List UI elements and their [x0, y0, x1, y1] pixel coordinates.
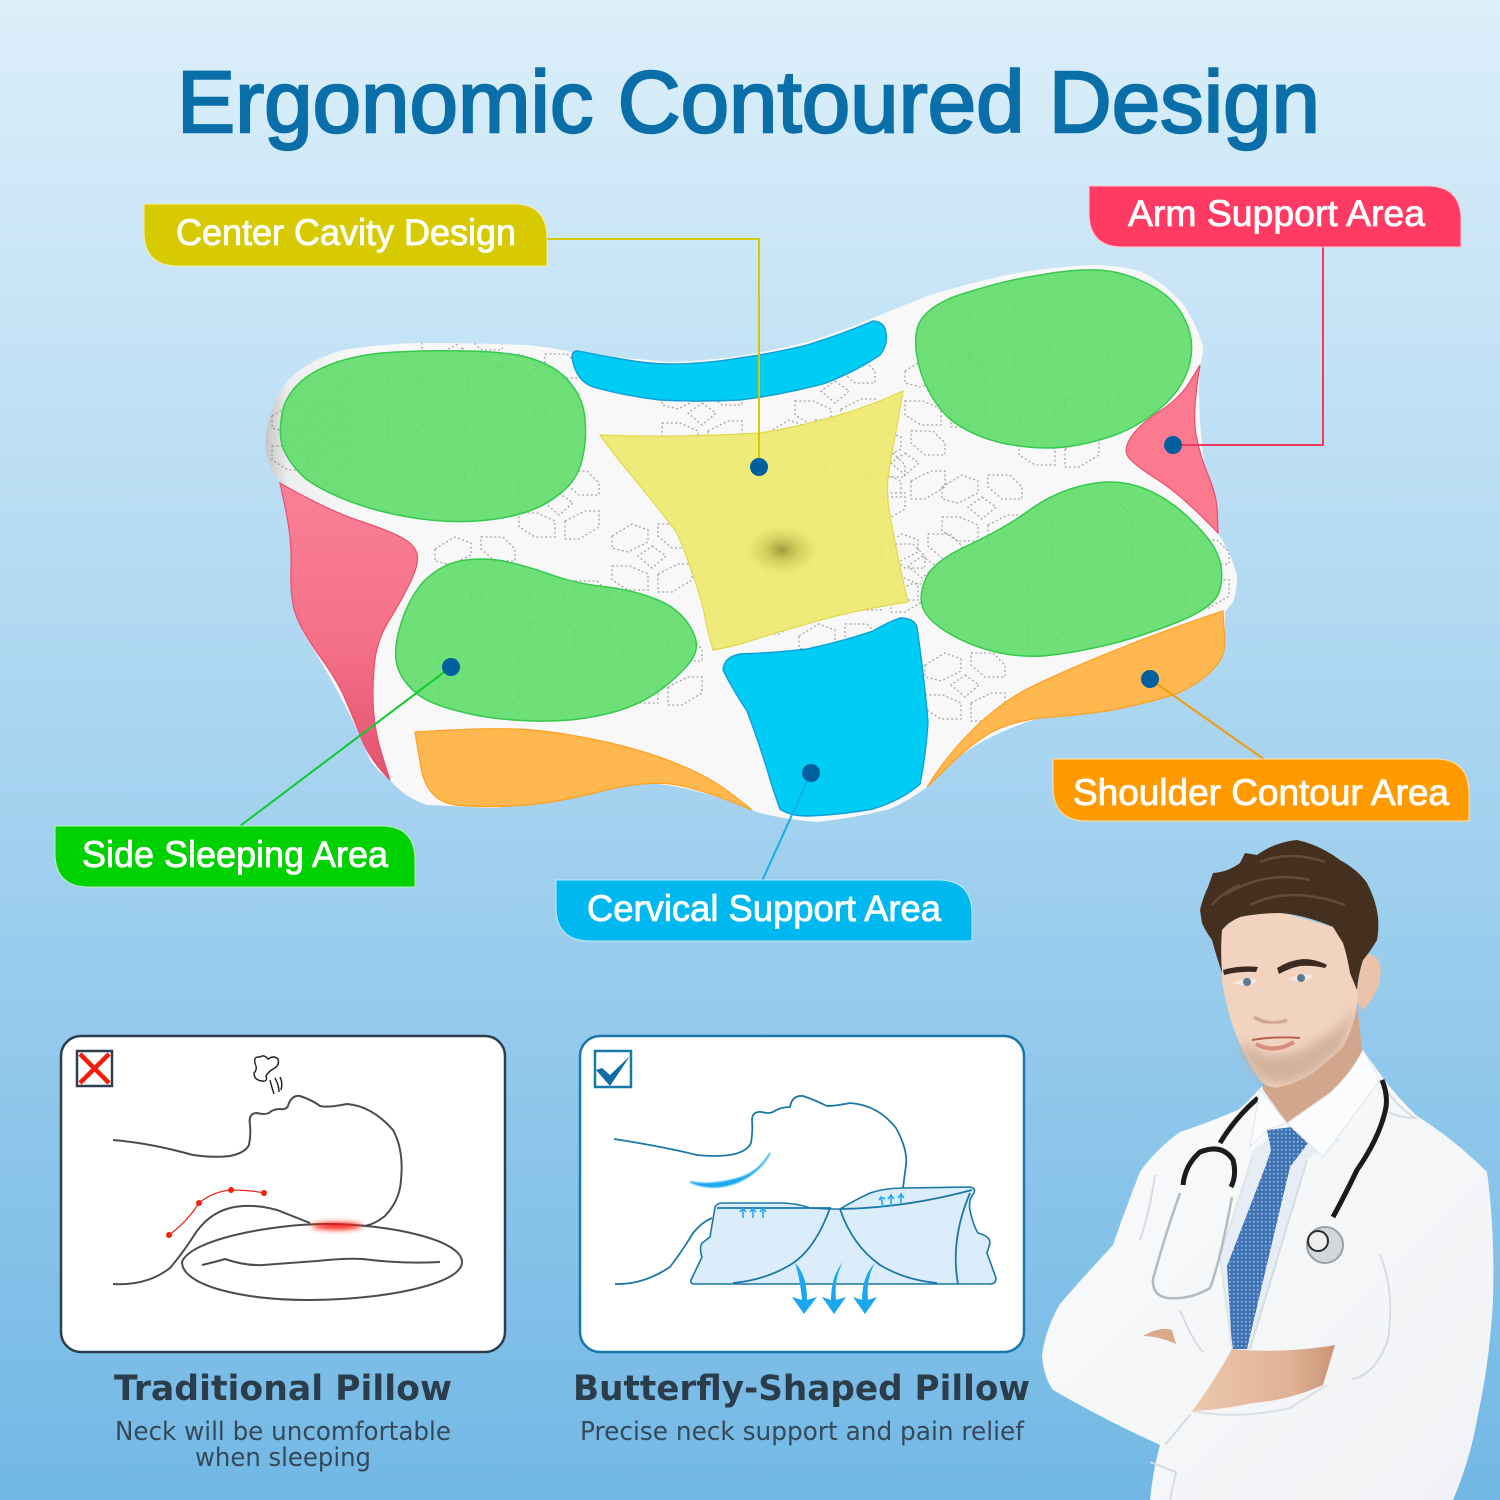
zone: yellow center cavity — [600, 391, 908, 650]
zone: green upper right — [916, 270, 1192, 448]
doctor figure — [1042, 840, 1493, 1500]
eyes — [1233, 974, 1314, 986]
necktie — [1227, 1127, 1308, 1349]
label: cervical support area: Cervical Support Area — [587, 888, 941, 929]
caption: traditional pillow — [114, 1369, 452, 1473]
icon: red cross — [77, 1051, 112, 1086]
illustration: head and neck outline — [113, 1096, 462, 1300]
ear — [1355, 954, 1381, 1010]
nose and mouth — [1252, 1017, 1300, 1049]
icon: check mark — [595, 1051, 631, 1087]
zone: green upper left — [280, 351, 586, 522]
pillow diagram — [265, 265, 1237, 822]
zone: blue top neck area — [572, 321, 886, 401]
stubble shading — [1238, 1003, 1357, 1084]
caption: butterfly-shaped pillow: Butterfly-Shaped Pillow — [573, 1369, 1030, 1409]
icon: neck support swoosh — [690, 1153, 770, 1187]
caption: butterfly-shaped pillow — [573, 1369, 1030, 1447]
zone: blue cervical support — [723, 618, 928, 816]
hand under arm — [1143, 1329, 1176, 1344]
label: shoulder contour area — [1053, 759, 1469, 821]
marker dots — [442, 436, 1182, 782]
pillow body — [265, 265, 1237, 822]
label: center cavity design — [144, 204, 547, 266]
red spine curve — [166, 1187, 267, 1238]
caption: traditional pillow: Neck will be uncomfortable — [115, 1417, 451, 1447]
center dimple — [746, 526, 818, 574]
quilted hexagon texture — [272, 302, 1229, 721]
zone: orange right shoulder — [927, 611, 1225, 787]
title: Ergonomic Contoured Design — [177, 54, 1320, 151]
label: cervical support area — [556, 880, 972, 941]
hair highlights — [1212, 856, 1345, 905]
label: side sleeping area — [55, 826, 415, 887]
eyebrows — [1223, 959, 1327, 975]
face — [1222, 912, 1358, 1088]
leader line: center cavity — [547, 239, 759, 467]
shirt collar — [1250, 1050, 1380, 1157]
zone: pink left arm support — [280, 483, 418, 780]
label: arm support area — [1089, 186, 1461, 247]
label: arm support area: Arm Support Area — [1128, 193, 1425, 234]
zone: orange left shoulder — [415, 729, 752, 810]
hair — [1200, 840, 1378, 990]
zone: green lower left — [396, 559, 696, 721]
zone: green lower right — [921, 482, 1222, 656]
neck pain marker — [312, 1222, 362, 1230]
label: side sleeping area: Side Sleeping Area — [82, 834, 388, 875]
label: shoulder contour area: Shoulder Contour Area — [1073, 772, 1449, 813]
leader line: cervical support — [762, 773, 811, 881]
icon: large down arrows — [792, 1262, 877, 1314]
label: center cavity design: Center Cavity Design — [176, 212, 516, 253]
shirt front — [1220, 1125, 1340, 1349]
leader line: arm support — [1173, 247, 1323, 445]
caption: traditional pillow: Traditional Pillow — [114, 1369, 452, 1409]
stethoscope — [1153, 1080, 1386, 1298]
caption: butterfly-shaped pillow: Precise neck support and pain relief — [580, 1417, 1025, 1447]
neck — [1263, 1005, 1363, 1123]
panel: traditional pillow — [61, 1036, 505, 1352]
illustration: head and pillow lines — [614, 1096, 972, 1284]
leader line: shoulder contour — [1150, 679, 1265, 760]
zone: pink right arm support — [1126, 365, 1218, 533]
coat shading folds — [1140, 1085, 1415, 1500]
white coat — [1042, 1050, 1493, 1500]
crossed forearm — [1192, 1345, 1335, 1411]
panel: butterfly-shaped pillow — [580, 1036, 1024, 1352]
illustration: pillow fill — [691, 1187, 996, 1284]
icon: small up arrows — [740, 1194, 904, 1218]
icon: breath puff — [254, 1056, 282, 1094]
caption: traditional pillow: when sleeping — [195, 1443, 371, 1473]
leader line: side sleeping — [240, 667, 451, 826]
